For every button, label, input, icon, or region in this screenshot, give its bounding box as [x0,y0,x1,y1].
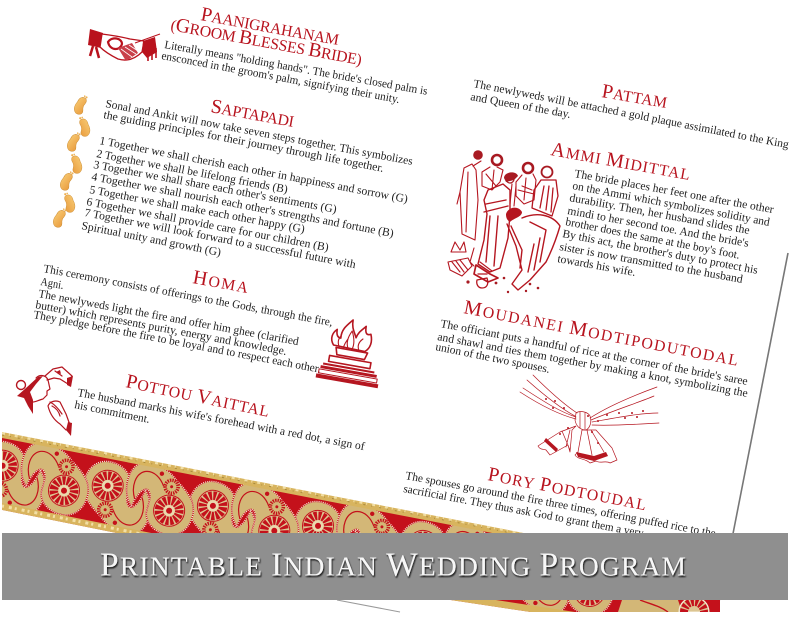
text: seven vows: 1 Together we shall cherish each other in happiness and sorrow (G) [98,134,409,206]
text: Pory Podtoudal description: The spouses go around the fire three times, offering puffed rice to the [404,469,717,540]
page lower edge [337,600,400,612]
text: Ammi Midittal description: sister is now transmitted to the husband [558,240,744,286]
text: Ammi Midittal description [556,167,775,286]
panel: Pory Podtoudal [402,463,717,540]
panel: Pattam [469,77,790,151]
text: seven vows: 5 Together we shall make each other happy (G) [88,183,306,236]
text: Ammi Midittal description: By this act, the brother's duty to protect his [561,227,759,277]
panel: Saptapadi [52,94,414,271]
page right edge [720,253,788,600]
text: seven vows: 6 Together we shall provide care for our children (B) [85,195,330,254]
text: Moudanei Modtipodutodal description: and shawl and ties them together by making a knot, symbolizing the [436,330,749,400]
heading: Ammi Midittal: AMMI MIDITTAL [549,138,692,185]
banner title text: PRINTABLE INDIAN WEDDING PROGRAM [100,546,686,584]
text: Homa description: They pledge before the fire to be loyal and to respect each other. [32,308,322,376]
heading: Paanigrahanam: (GROOM BLESSES BRIDE) [169,13,364,70]
heading: Homa: HOMA [191,266,251,298]
text: Homa description: Agni. [39,275,65,292]
illustration: knot of saree and shawl [520,375,659,463]
panel: Pottou Vaittal [16,367,366,453]
text: Paanigrahanam description: ensconced in the groom's palm, signifying their unity. [160,49,401,106]
heading: Saptapadi: SAPTAPADI [209,95,296,132]
text: Homa description: This ceremony consists of offerings to the Gods, through the fire, [42,262,334,329]
heading: Paanigrahanam: PAANIGRAHANAM [199,3,341,50]
text: Ammi Midittal description: mindi to her second toe. And the bride's [566,204,750,250]
text: Homa description: The newlyweds light the fire and offer him ghee (clarified [37,287,300,348]
text: Pory Podtoudal description: sacrificial fire. They thus ask God to grant them a very [402,482,645,540]
panel: red and gold paisley border band [2,432,720,612]
icon: clasped hands [88,29,160,61]
panel: Homa [32,262,389,388]
text: Moudanei Modtipodutodal description: The officiant puts a handful of rice at the corner of the bride's saree [439,317,749,388]
panel: Paanigrahanam [88,3,429,106]
text: Ammi Midittal description: The bride places her feet one after the other [573,167,775,216]
text: Pattam description: and Queen of the day. [469,90,572,121]
heading: Moudanei Modtipodutodal: MOUDANEI MODTIPODUTODAL [462,296,740,371]
icon: sacred fire on stepped altar [316,315,389,388]
text: Pattam description: The newlyweds will be attached a gold plaque assimilated to the King [472,77,790,151]
text: seven vows [80,134,409,271]
text: Pottou Vaittal description: his commitment. [73,398,151,426]
text: seven vows: 3 Together we shall share each other's sentiments (G) [92,158,338,216]
text: seven vows: 7 Together we will look forward to a successful future with [83,206,357,271]
text: Paanigrahanam description: Literally means "holding hands". The bride's closed palm is [163,38,429,98]
text: Ammi Midittal description: brother does the same at the boy's foot. [564,215,741,262]
text: seven vows: 4 Together we shall nourish each other's strengths and fortune (B) [90,170,395,240]
panel: Ammi Midittal [448,138,775,293]
icon: seven golden footprints [52,94,90,228]
text: Saptapadi introduction: Sonal and Ankit will now take seven steps together. This symbolizes [104,97,414,168]
heading: Pory Podtoudal: PORY PODTOUDAL [486,463,648,515]
text: Homa description: butter) which represents purity, energy and knowledge. [34,298,288,358]
text: Moudanei Modtipodutodal description: union of the two spouses. [434,340,551,376]
text: Ammi Midittal description: on the Ammi which symbolizes solidity and [571,179,771,229]
banner: title strip [2,533,788,600]
text: seven vows: 2 Together we shall be lifelong friends (B) [95,147,289,196]
heading: Pattam: PATTAM [600,80,669,113]
text: Ammi Midittal description: towards his wife. [556,252,637,279]
illustration: family at the Ammi ceremony [448,150,560,293]
text: Homa description [32,262,334,376]
text: Pottou Vaittal description: The husband marks his wife's forehead with a red dot, a sign of [76,386,366,453]
text: seven vows: Spiritual unity and growth (G) [80,219,222,259]
heading: Pottou Vaittal: POTTOU VAITTAL [124,370,271,422]
icon: husband marking bride's forehead [16,367,73,436]
panel: Moudanei Modtipodutodal [434,296,749,463]
text: Saptapadi introduction: the guiding principles for their journey through life together. [102,108,385,175]
text: Ammi Midittal description: durability. Then, her husband slides the [568,191,751,237]
